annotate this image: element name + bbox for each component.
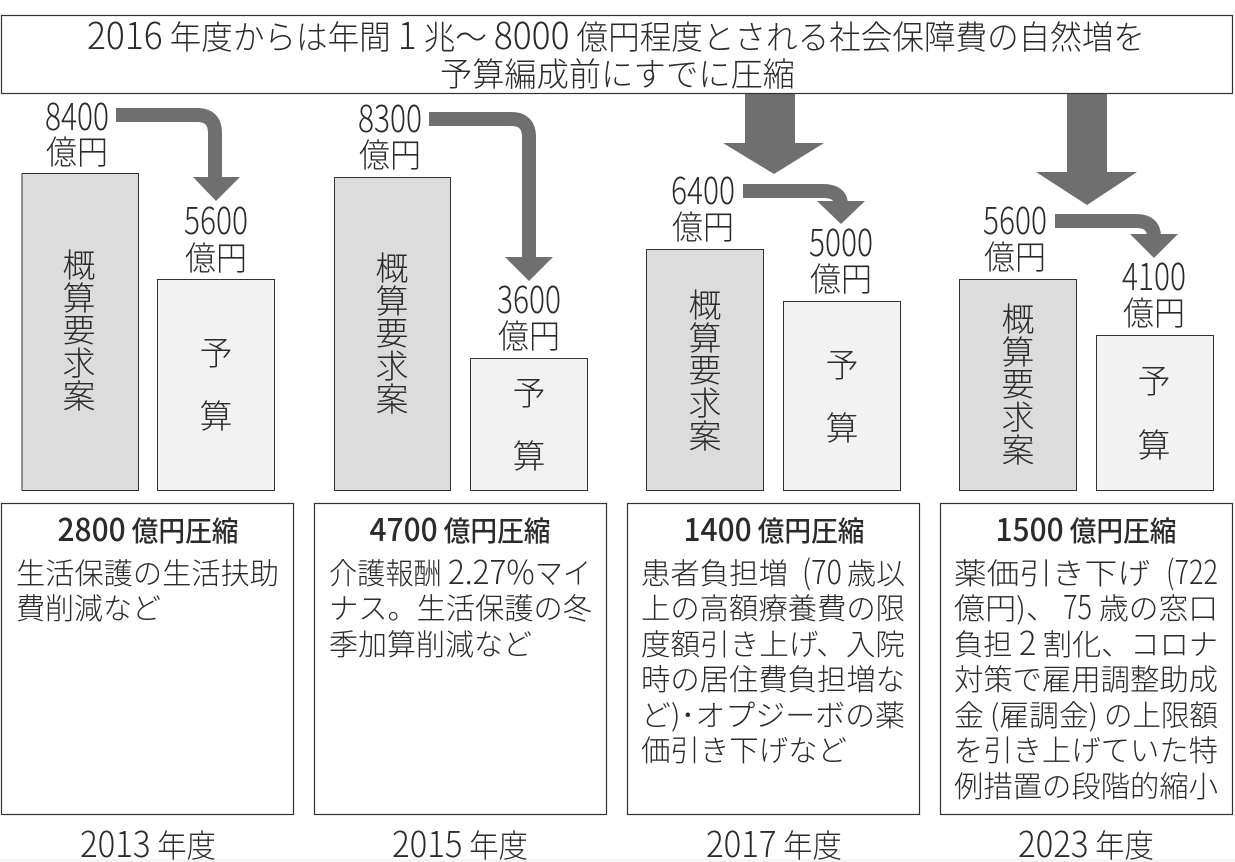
bar: 2023 budget — [1096, 336, 1214, 490]
bar: 2015 request: 要 — [376, 307, 408, 355]
bar: 2023 budget: 予 — [1138, 355, 1170, 403]
text block: 2023: (722 — [1166, 546, 1218, 594]
text block: 2015: 介護報酬 2.27%マイ — [329, 546, 591, 594]
bar: 2015 budget — [470, 358, 588, 490]
bar: 2023 request — [960, 280, 1076, 490]
text block: 2023: 負担 2 割化、コロナ — [954, 617, 1218, 665]
text block: 2023 — [954, 546, 1218, 806]
text block: 2017: (70 — [802, 546, 842, 594]
label: 5600: 億円 — [185, 232, 247, 280]
bar: 2013 request: 案 — [62, 370, 96, 418]
arrow: 2013 — [116, 115, 240, 201]
bar: 2013 request: 要 — [62, 304, 96, 352]
label: 5600: 5600 — [184, 191, 248, 245]
bar: 2023 request: 案 — [1002, 424, 1034, 472]
text block: 2015 — [329, 546, 592, 664]
panel: 2015 — [314, 504, 606, 814]
label: 8300: 8300 — [358, 89, 422, 143]
label: 4100: 4100 — [1122, 247, 1186, 301]
text block: 2023: を引き上げていた特 — [954, 728, 1218, 770]
label: 3600: 億円 — [498, 310, 560, 358]
text block: 2023: 対策で雇用調整助成 — [954, 657, 1218, 699]
text block: 2015: ナス。生活保護の冬 — [329, 586, 592, 628]
label: 8400: 億円 — [46, 126, 108, 174]
panel: 2017 — [628, 504, 920, 814]
bar: 2015 request: 概 — [376, 242, 408, 290]
bar: 2023 budget: 算 — [1138, 419, 1170, 467]
bar: 2013 request: 概 — [62, 239, 96, 287]
column: 2013 — [22, 87, 274, 490]
title box — [2, 6, 1232, 96]
panel: 2013 — [2, 504, 294, 814]
bar: 2015 request: 案 — [376, 373, 408, 421]
label: 4100 — [1122, 247, 1186, 335]
heading: 1500: 1500 億円圧縮 — [996, 506, 1176, 551]
label: 5600 — [184, 191, 248, 280]
bar: 2023 request: 算 — [1002, 326, 1034, 374]
heading: 2800: 2800 億円圧縮 — [58, 506, 239, 551]
label: 6400: 億円 — [672, 201, 734, 249]
bar: 2013 budget: 予 — [200, 327, 232, 375]
column: 2015 — [334, 89, 588, 490]
text block: 2023: 億円)、 — [954, 586, 1057, 628]
text block: 2023: 例措置の段階的縮小 — [954, 764, 1218, 806]
arrow: 2023 — [1055, 221, 1178, 258]
label: 8300 — [358, 89, 422, 177]
label: 5000: 億円 — [810, 253, 872, 301]
text block: 2017 — [641, 546, 905, 770]
text block: 2023: 歳の窓口 — [1099, 586, 1218, 628]
bar: 2017 budget: 予 — [826, 339, 858, 387]
bar: 2015 request: 算 — [376, 275, 408, 323]
label: 8400: 8400 — [45, 87, 109, 141]
text block: 2017: 患者負担増 — [641, 551, 788, 593]
bar: 2015 request: 求 — [376, 340, 408, 388]
label: 3600 — [497, 270, 561, 358]
label: 3600: 3600 — [497, 270, 561, 324]
bar: 2013 request — [22, 174, 138, 490]
title box: 2016 年度からは年間 1 兆～ 8000 億円程度とされる社会保障費の自然増を — [87, 6, 1145, 60]
bar: 2015 budget: 予 — [512, 367, 546, 415]
bar: 2017 request: 求 — [688, 377, 722, 425]
heading: 1400: 1400 億円圧縮 — [684, 506, 864, 551]
column: 2023 — [960, 191, 1214, 490]
text block: 2017: 歳以 — [847, 551, 905, 593]
bar: 2017 request: 案 — [688, 410, 722, 458]
bar: 2017 request: 概 — [688, 279, 722, 327]
bar: 2013 request: 求 — [62, 337, 96, 385]
bar: 2023 request: 求 — [1002, 391, 1034, 439]
arrow: 2017 — [743, 191, 865, 224]
arrow: 2015 — [429, 119, 553, 281]
bar: 2017 request: 算 — [688, 312, 722, 360]
bar: 2013 budget — [158, 280, 274, 490]
bar: 2017 request — [646, 250, 764, 490]
label: 5600: 億円 — [984, 231, 1046, 279]
text block: 2013: 費削減など — [16, 586, 161, 628]
label: 8400 — [45, 87, 109, 174]
text block: 2023: 薬価引き下げ — [954, 551, 1150, 593]
text block: 2017: 価引き下げなど — [641, 728, 847, 770]
text block: 2023: 金 — [954, 693, 984, 735]
bar: 2023 request: 概 — [1002, 293, 1034, 341]
label: 6400 — [671, 161, 735, 249]
text block: 2017: ど)･オプジーボの薬 — [641, 693, 905, 735]
bar: 2017 budget: 算 — [826, 402, 858, 450]
label: 8300: 億円 — [359, 129, 421, 177]
text block: 2015: 季加算削減など — [329, 622, 532, 664]
label: 5000: 5000 — [809, 213, 873, 267]
text block: 2017: 上の高額療養費の限 — [641, 586, 905, 628]
text block: 2017: 時の居住費負担増な — [641, 657, 905, 699]
bar: 2013 request: 算 — [62, 272, 96, 320]
bar: 2013 budget: 算 — [200, 390, 232, 438]
text block: 2013: 生活保護の生活扶助 — [16, 551, 279, 593]
label: 5600 — [983, 191, 1047, 279]
label: 6400: 6400 — [671, 161, 735, 215]
big arrow: 2017 — [723, 90, 824, 174]
title box: 予算編成前にすでに圧縮 — [440, 48, 795, 96]
text block: 2023: の上限額 — [1104, 693, 1218, 735]
heading: 4700: 4700 億円圧縮 — [370, 506, 550, 551]
bar: 2017 request: 要 — [688, 344, 722, 392]
bar: 2015 budget: 算 — [512, 430, 546, 478]
bar: 2015 request — [334, 178, 450, 490]
bar: 2023 request: 要 — [1002, 358, 1034, 406]
big arrow: 2023 — [1036, 90, 1137, 205]
label: 5000 — [809, 213, 873, 301]
text block: 2023: (雇調金) — [990, 693, 1098, 735]
panel: 2023 — [940, 504, 1232, 814]
text block: 2013 — [16, 551, 279, 628]
text block: 2017: 度額引き上げ、入院 — [641, 622, 905, 664]
label: 4100: 億円 — [1123, 287, 1185, 335]
bar: 2017 budget — [784, 302, 900, 490]
label: 5600: 5600 — [983, 191, 1047, 245]
text block: 2023: 75 — [1063, 581, 1092, 629]
column: 2017 — [646, 161, 900, 490]
